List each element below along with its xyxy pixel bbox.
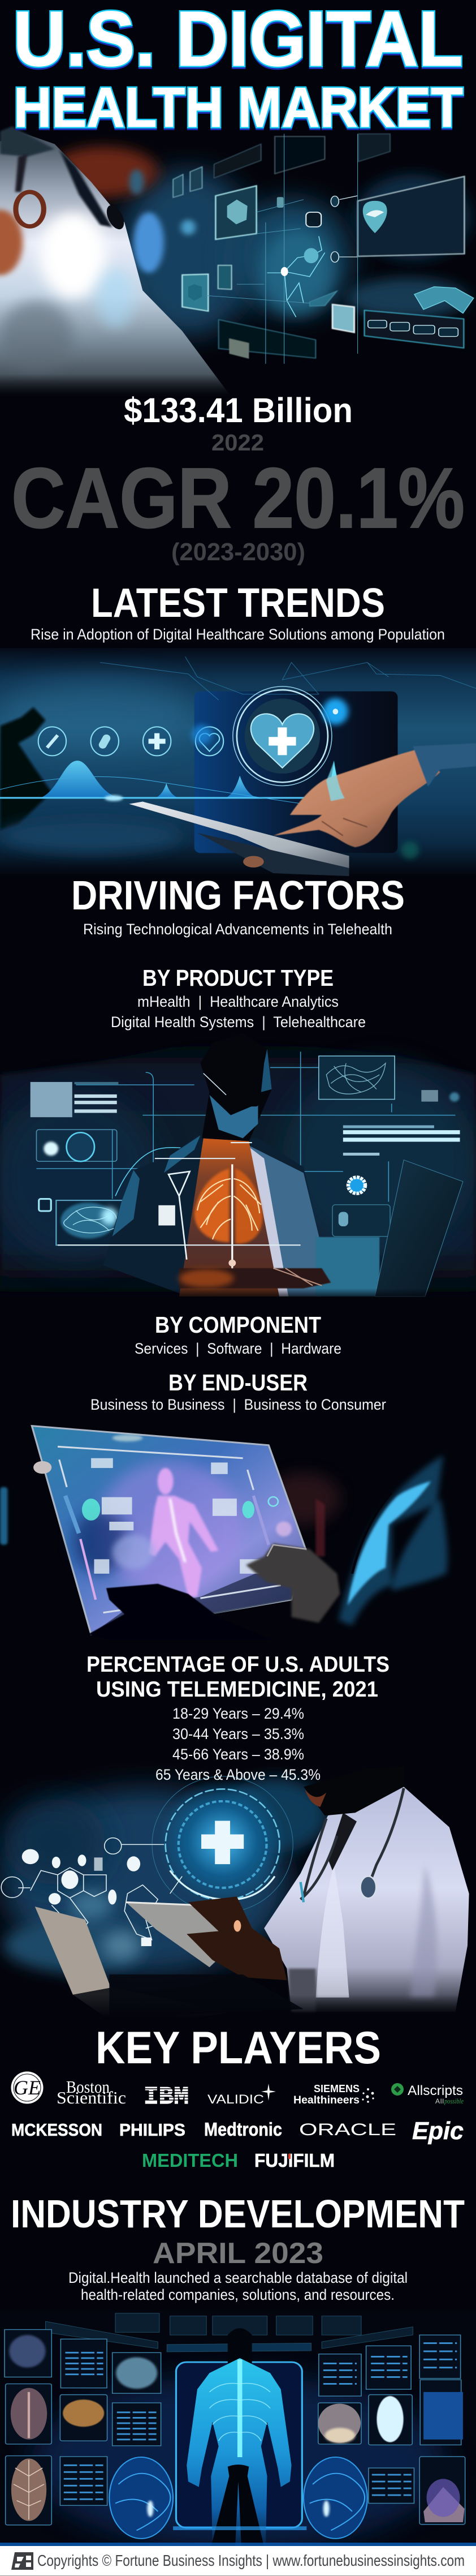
overlay lines and small icon bbox=[58, 1143, 301, 1245]
logo: Boston Scientific bbox=[57, 2077, 126, 2107]
logo: Allscripts: Allscripts bbox=[408, 2083, 463, 2098]
hands bbox=[88, 1584, 273, 1640]
logo: Epic: Epic bbox=[412, 2117, 464, 2145]
hand and sleeve bbox=[273, 743, 476, 847]
glowing body back view bbox=[187, 2358, 292, 2547]
skin tone and collar bbox=[0, 210, 23, 276]
logo: Meditech: MEDITECH bbox=[142, 2150, 238, 2171]
heading: by product type: BY PRODUCT TYPE bbox=[142, 965, 334, 991]
component list: Services | Software | Hardware bbox=[135, 1340, 341, 1357]
hands on desk bbox=[179, 1268, 331, 1289]
right screens bbox=[318, 2335, 465, 2525]
blue coat sleeve bbox=[339, 1456, 447, 1626]
logo: Fortune Business Insights mark bbox=[11, 2552, 33, 2570]
logo: GE bbox=[11, 2071, 43, 2104]
data panels left bbox=[31, 1082, 72, 1117]
neck and face bbox=[304, 1767, 404, 1815]
heading: percentage of U.S. adults using telemedicine: USING TELEMEDICINE, 2021 bbox=[96, 1677, 378, 1702]
logo: Boston Scientific: Scientific bbox=[57, 2088, 126, 2107]
logo: Validic bbox=[207, 2084, 276, 2106]
image: masked doctor with glowing lungs and data panels bbox=[0, 1033, 476, 1300]
logo: GE: GE bbox=[14, 2076, 41, 2099]
blue anatomical blobs bbox=[109, 2457, 367, 2539]
central screen bbox=[176, 2362, 302, 2528]
heading: by component: BY COMPONENT bbox=[155, 1312, 321, 1338]
logo: Fujifilm: FUJIFILM bbox=[254, 2150, 335, 2171]
stethoscope ring bbox=[16, 192, 44, 226]
logo: Allscripts bbox=[391, 2083, 464, 2105]
tablet-side screen bbox=[194, 692, 397, 853]
base year: 2022 bbox=[211, 430, 264, 456]
product types line 2: Digital Health Systems | Telehealthcare bbox=[111, 1014, 366, 1031]
heading: key players: KEY PLAYERS bbox=[96, 2023, 381, 2073]
age group statistics bbox=[155, 1705, 321, 1783]
logo: Siemens Healthineers: SIEMENS bbox=[314, 2083, 360, 2094]
gear icon bbox=[348, 1177, 365, 1193]
product types line 1: mHealth | Healthcare Analytics bbox=[137, 993, 339, 1010]
tablet bbox=[129, 802, 349, 870]
image: doctor using tablet with medical cross hologram bbox=[0, 1767, 476, 2018]
doctor's white coat bbox=[0, 131, 231, 396]
end-user list: Business to Business | Business to Consumer bbox=[90, 1396, 386, 1413]
age group statistics: 45-66 Years – 38.9% bbox=[172, 1746, 304, 1763]
development description: Digital.Health launched a searchable database of digital bbox=[68, 2269, 408, 2286]
logo: IBM: IBM bbox=[144, 2083, 189, 2111]
logo: Allscripts: All bbox=[435, 2097, 444, 2105]
bottom glow bbox=[0, 2543, 476, 2546]
molecule icons bbox=[1, 1838, 182, 1940]
map pin and chevron icons bbox=[363, 201, 387, 233]
image: hand on tablet with heart-health icons bbox=[0, 648, 476, 876]
network lines bbox=[100, 656, 476, 700]
top row screens bbox=[46, 2313, 413, 2352]
doctor silhouette: coat and torso bbox=[103, 1135, 334, 1296]
head silhouette bbox=[228, 2328, 252, 2368]
data panels right bbox=[319, 1056, 395, 1100]
market size figure: $133.41 Billion bbox=[124, 391, 353, 430]
tablet bbox=[126, 1902, 240, 1967]
image: doctor and holographic health dashboard bbox=[0, 126, 476, 396]
tie, collar and stethoscope bbox=[328, 1813, 357, 1870]
heading: by end-user: BY END-USER bbox=[168, 1369, 308, 1396]
age group statistics: 30-44 Years – 35.3% bbox=[172, 1725, 304, 1742]
glowing lungs bbox=[194, 1169, 263, 1244]
legs shadow bbox=[211, 2465, 264, 2547]
left screens bbox=[5, 2330, 161, 2525]
connector lines bbox=[36, 1051, 456, 1242]
heading: percentage of U.S. adults using telemedicine bbox=[86, 1652, 390, 1702]
holographic panels bbox=[173, 134, 465, 359]
neural network and connector lines bbox=[261, 230, 334, 316]
title bbox=[13, 0, 463, 140]
dashboard readouts bbox=[368, 320, 458, 337]
logo: Siemens Healthineers bbox=[293, 2083, 374, 2106]
logo: Validic: VALIDIC bbox=[207, 2092, 264, 2106]
plant silhouette bbox=[0, 707, 51, 830]
company logos bbox=[11, 2071, 464, 2171]
hands bbox=[187, 1896, 287, 1980]
development description bbox=[68, 2269, 408, 2303]
age group statistics: 65 Years & Above – 45.3% bbox=[155, 1766, 321, 1783]
heading: latest trends: LATEST TRENDS bbox=[91, 581, 385, 626]
pulse waves bbox=[40, 761, 122, 798]
head and neck bbox=[200, 1033, 272, 1141]
cross hologram bbox=[152, 1776, 293, 1913]
blue glow dot bbox=[323, 698, 348, 725]
logo: Allscripts: possible bbox=[444, 2097, 464, 2105]
logo: McKesson: MCKESSON bbox=[11, 2120, 102, 2140]
latest trend description: Rise in Adoption of Digital Healthcare Solutions among Population bbox=[31, 626, 445, 643]
driving factor description: Rising Technological Advancements in Telehealth bbox=[83, 921, 392, 938]
logo: Siemens Healthineers: Healthineers bbox=[293, 2094, 360, 2106]
laptop bbox=[35, 1907, 112, 1995]
development date: APRIL 2023 bbox=[153, 2237, 323, 2270]
tablet body bbox=[32, 1426, 306, 1634]
laptop bbox=[315, 1237, 379, 1296]
doctor's coat bbox=[264, 1787, 469, 2012]
image: human body scan surrounded by medical screens bbox=[0, 2311, 476, 2549]
image: hands holding transparent body-scan tablet bbox=[0, 1426, 447, 1640]
heading: percentage of U.S. adults using telemedicine: PERCENTAGE OF U.S. ADULTS bbox=[86, 1652, 390, 1677]
heart badge bbox=[233, 686, 332, 785]
logo: Philips: PHILIPS bbox=[119, 2120, 185, 2140]
age group statistics: 18-29 Years – 29.4% bbox=[172, 1705, 304, 1722]
logo: Medtronic: Medtronic bbox=[204, 2119, 282, 2140]
heading: driving factors: DRIVING FACTORS bbox=[71, 873, 405, 918]
development description: health-related companies, solutions, and resources. bbox=[81, 2286, 395, 2303]
footer band bbox=[0, 2546, 476, 2576]
glowing human figure bbox=[149, 1468, 219, 1597]
forecast period: (2023-2030) bbox=[171, 538, 305, 566]
logo: Boston Scientific: Boston bbox=[66, 2077, 110, 2097]
screen content: data rows bbox=[64, 2343, 457, 2499]
logo: Oracle: ORACLE bbox=[299, 2120, 396, 2139]
tablet UI bbox=[58, 1446, 281, 1613]
icon row bbox=[38, 727, 223, 755]
